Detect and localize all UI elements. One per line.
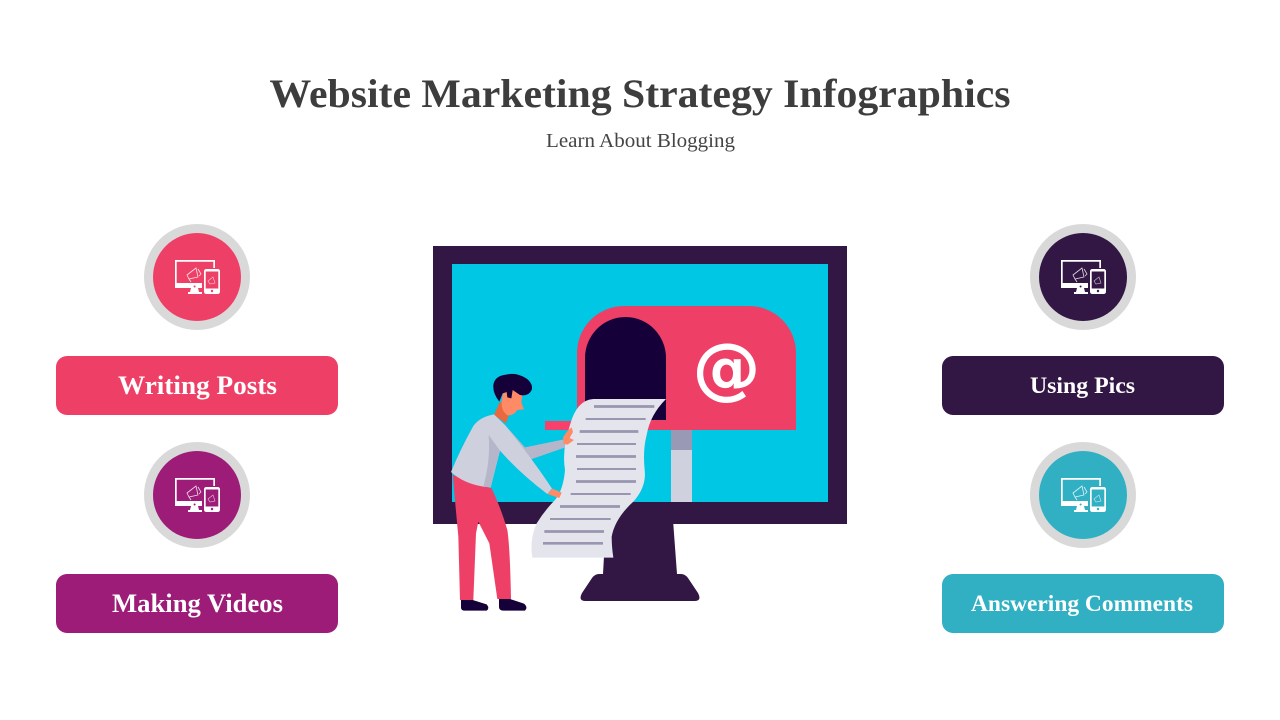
item: Making Videos — [56, 442, 338, 633]
neck — [494, 402, 511, 423]
mailbox — [545, 306, 796, 502]
item: Using Pics — [942, 224, 1224, 415]
icon: devices on teal circle — [1030, 442, 1136, 548]
monitor — [433, 246, 847, 601]
person and letter — [451, 374, 666, 611]
subtitle: Learn About Blogging — [546, 130, 735, 152]
at sign: @ — [692, 329, 760, 408]
label: Using Pics — [942, 356, 1224, 415]
label: Answering Comments — [942, 574, 1224, 633]
legs — [453, 475, 511, 600]
icon: devices on purple circle — [144, 442, 250, 548]
label: Writing Posts: Writing Posts — [118, 371, 277, 400]
far arm — [500, 425, 565, 461]
icon: devices on pink circle — [144, 224, 250, 330]
hands — [547, 427, 574, 498]
central illustration — [433, 246, 847, 611]
letter lines — [543, 406, 654, 543]
label: Answering Comments: Answering Comments — [971, 591, 1193, 616]
hair — [493, 374, 532, 402]
head — [502, 388, 524, 415]
label: Writing Posts — [56, 356, 338, 415]
shoes — [461, 599, 526, 611]
icon: devices on dark circle — [1030, 224, 1136, 330]
item: Writing Posts — [56, 224, 338, 415]
label: Making Videos — [56, 574, 338, 633]
label: Making Videos: Making Videos — [112, 589, 283, 618]
letter paper — [531, 399, 666, 558]
torso and arm — [451, 414, 552, 494]
label: Using Pics: Using Pics — [1030, 373, 1135, 398]
item: Answering Comments — [942, 442, 1224, 633]
title: Website Marketing Strategy Infographics — [270, 71, 1010, 116]
